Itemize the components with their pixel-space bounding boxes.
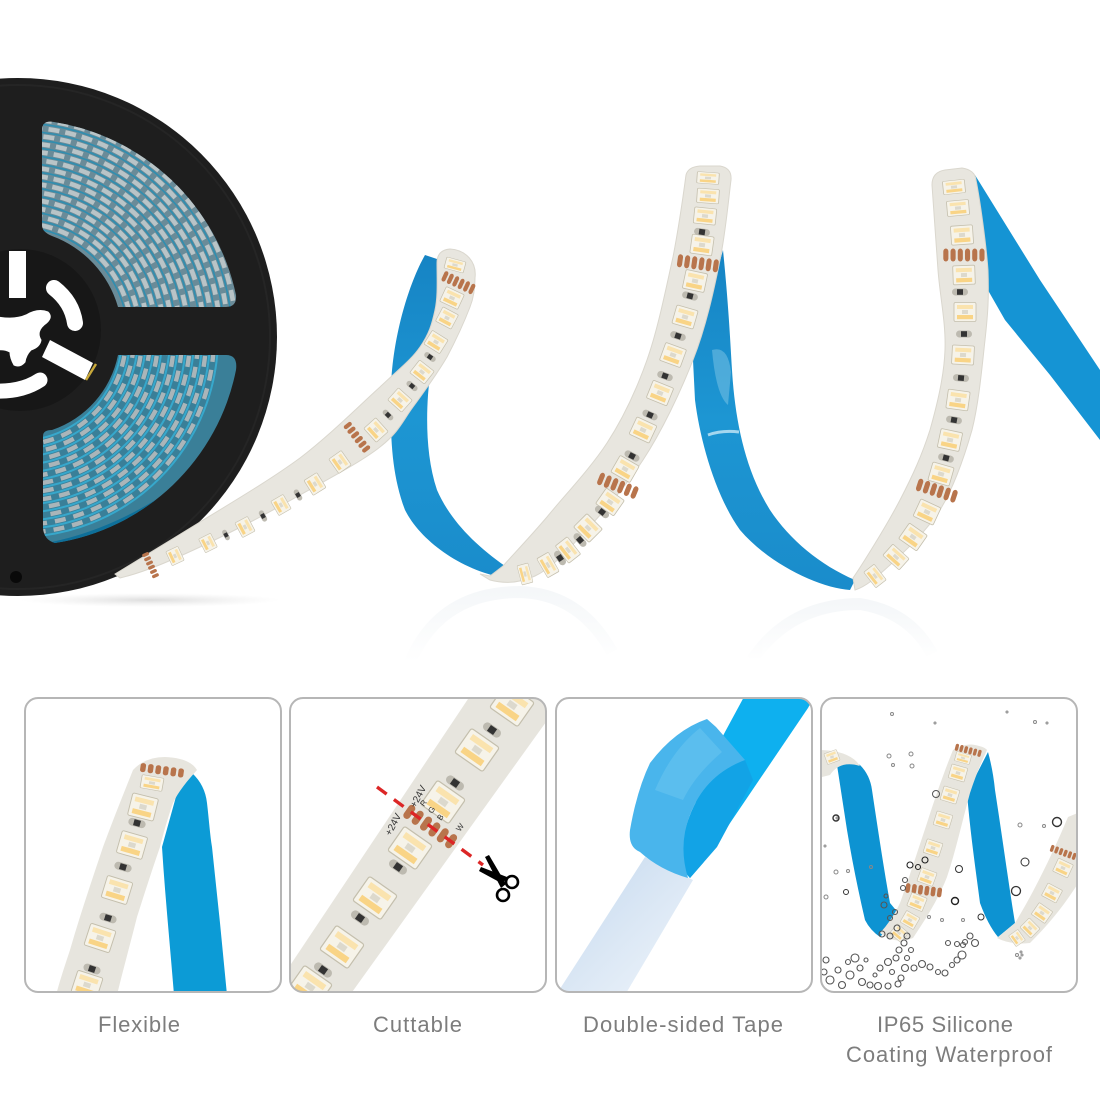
icon: scissors bbox=[479, 855, 518, 901]
hub openings bbox=[0, 251, 93, 391]
blue backing, right end bbox=[975, 175, 1100, 440]
strip, middle bbox=[880, 745, 987, 941]
copper pads bbox=[140, 763, 184, 778]
contact labels: +24V bbox=[383, 812, 404, 838]
curl highlight bbox=[655, 728, 722, 800]
LEDs bbox=[824, 743, 1077, 947]
LEDs on section 2 bbox=[517, 172, 719, 585]
blue backing, second loop bbox=[693, 250, 855, 590]
panel: flexible bbox=[25, 698, 281, 1000]
strip, right bbox=[997, 812, 1080, 943]
contact labels: B bbox=[435, 813, 446, 822]
strip section 2 bbox=[480, 166, 731, 585]
release liner bbox=[556, 857, 693, 995]
blue backing bbox=[162, 773, 227, 995]
label: Flexible: Flexible bbox=[98, 1012, 180, 1037]
blue backing, first loop bbox=[391, 255, 505, 578]
coiled strip, lower window bbox=[43, 355, 236, 543]
strip section 1 bbox=[115, 249, 476, 579]
reel shadow bbox=[20, 593, 280, 607]
reel wire bbox=[86, 364, 96, 380]
label: Double-sided Tape: Double-sided Tape bbox=[583, 1012, 783, 1037]
LEDs on section 3 bbox=[864, 179, 985, 588]
label: IP65 Silicone Coating Waterproof: Coating Waterproof bbox=[846, 1042, 1053, 1067]
reel hub bbox=[0, 249, 101, 411]
reel rim highlight bbox=[0, 85, 270, 589]
LEDs on section 1 bbox=[142, 257, 476, 579]
water droplets bbox=[824, 711, 1062, 959]
label: Cuttable: Cuttable bbox=[373, 1012, 462, 1037]
blue backing, left bbox=[837, 762, 900, 937]
tape curl outer bbox=[630, 719, 745, 878]
panel frame bbox=[25, 698, 281, 992]
strip, left end bbox=[822, 750, 860, 777]
panel frame bbox=[821, 698, 1077, 992]
contact labels: R bbox=[418, 798, 429, 808]
coiled strip, upper window bbox=[42, 122, 236, 307]
blue backing, middle bbox=[967, 752, 1015, 937]
strip bbox=[56, 757, 197, 995]
water splash bbox=[821, 857, 978, 990]
reflections under strip bbox=[410, 592, 932, 662]
panel: waterproof bbox=[818, 698, 1080, 992]
contact labels bbox=[386, 784, 464, 834]
panel frame bbox=[556, 698, 812, 992]
reel pin hole bbox=[10, 571, 22, 583]
contact labels: +24V bbox=[408, 784, 429, 810]
contact labels: W bbox=[454, 821, 466, 833]
LEDs bbox=[71, 775, 164, 1000]
strip bbox=[285, 696, 550, 995]
panel frame bbox=[290, 698, 546, 992]
panel: double-sided tape bbox=[556, 695, 815, 995]
contact labels: G bbox=[426, 805, 437, 815]
cut line bbox=[377, 787, 483, 865]
copper pads bbox=[402, 803, 459, 850]
tape curl inner bbox=[682, 760, 753, 878]
label: IP65 Silicone Coating Waterproof: IP65 Silicone bbox=[877, 1012, 1013, 1037]
strip section 3 bbox=[853, 168, 988, 590]
LEDs bbox=[292, 699, 534, 991]
blue tape strip bbox=[683, 695, 815, 878]
LED reel bbox=[0, 78, 277, 596]
panel: cuttable bbox=[289, 697, 547, 993]
reel disc bbox=[0, 78, 277, 596]
label: IP65 Silicone Coating Waterproof bbox=[846, 1012, 1053, 1067]
